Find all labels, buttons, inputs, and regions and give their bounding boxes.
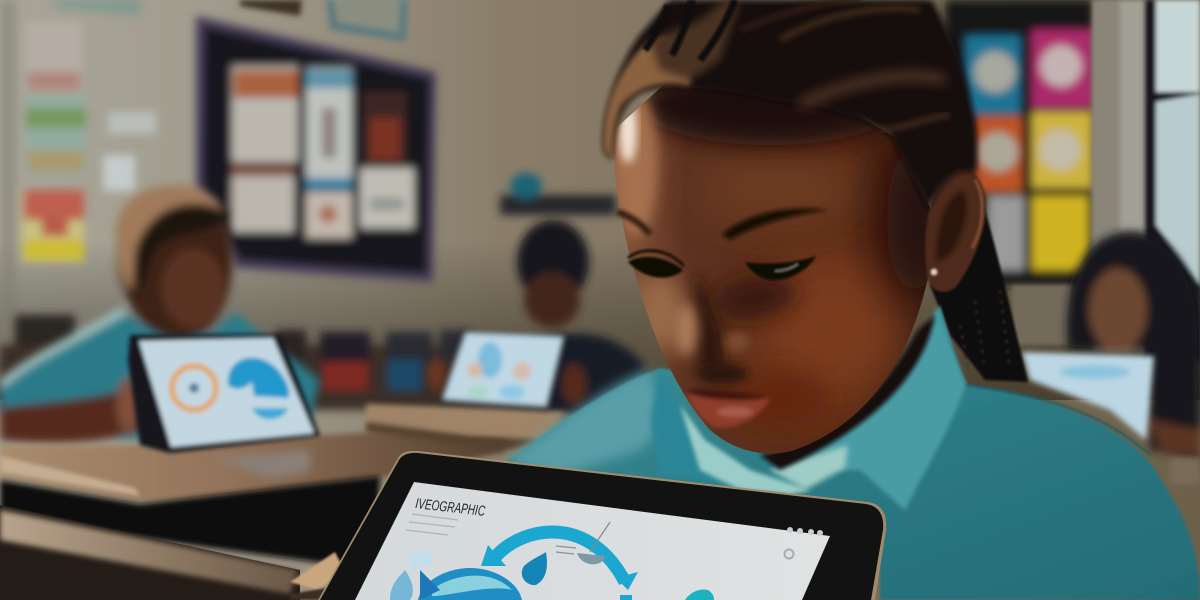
- right wall and window: [1012, 0, 1200, 360]
- under nose shadow: [696, 364, 748, 384]
- settings icon: [784, 550, 794, 558]
- blue arc: [252, 408, 288, 419]
- teal blob: [685, 589, 714, 600]
- top wall frames: [240, 0, 408, 42]
- right eyebrow: [722, 208, 828, 240]
- globe graphic: [418, 568, 522, 600]
- back shelf: [500, 173, 616, 215]
- wall posters on the left: [0, 0, 156, 360]
- student shirt: [0, 312, 320, 440]
- shirt collar right: [770, 306, 966, 510]
- blue cycle arrow: [481, 532, 638, 590]
- earring: [931, 269, 937, 275]
- low cabinets: [0, 315, 600, 410]
- tablet right: [1022, 352, 1154, 440]
- girl ear: [925, 168, 986, 292]
- upper forehead shading: [640, 85, 886, 160]
- desk left: [0, 404, 1200, 570]
- foreground desk: [0, 505, 345, 600]
- girl back braids: [930, 200, 1028, 382]
- forehead highlight: [619, 97, 637, 163]
- right bulletin board with coloured cards: [945, 0, 1093, 285]
- girl shirt: [400, 305, 1200, 600]
- under desk shadow: [0, 476, 380, 570]
- tablet screen: [355, 482, 830, 600]
- tablet small text lines: [406, 514, 458, 535]
- drop and splash: [390, 550, 433, 600]
- mid forehead glow: [700, 160, 860, 220]
- tablet left screen: [139, 338, 314, 447]
- collar lit edge: [770, 445, 848, 490]
- lips: [686, 389, 770, 428]
- hair rows: [645, 0, 735, 60]
- tablet rear: [440, 330, 566, 410]
- forehead lit side: [614, 93, 658, 237]
- right student: [1067, 232, 1200, 460]
- orange ring chart: [172, 366, 216, 410]
- rear student: [426, 220, 660, 420]
- bulletin board: [196, 16, 436, 282]
- nose tip: [725, 332, 749, 352]
- girl hair: [603, 0, 977, 210]
- bright desk edge: [0, 456, 140, 496]
- camera dots: [787, 527, 823, 536]
- water drop icon: [522, 552, 547, 585]
- face shading layers: [614, 65, 943, 430]
- foreground tablet: [318, 451, 886, 600]
- tablet left: [128, 334, 320, 453]
- left student: [0, 185, 320, 443]
- girl neck shadow: [760, 315, 935, 470]
- left cheek light: [634, 272, 686, 352]
- right temple shadow: [887, 140, 943, 300]
- tablet title: IVEOGRAPHIC: [415, 496, 486, 520]
- right eye: [745, 256, 816, 280]
- shirt left highlight: [505, 370, 670, 475]
- tablet body: [318, 451, 886, 600]
- student head: [116, 185, 232, 340]
- small arrow piece: [620, 595, 632, 600]
- left eye: [628, 251, 684, 278]
- nose highlight: [675, 304, 697, 356]
- hair frizz highlight: [603, 38, 690, 160]
- left eyebrow: [617, 212, 650, 234]
- tablet reflection on desk: [215, 450, 310, 478]
- under eye shadow: [710, 271, 800, 325]
- girl face: [614, 65, 943, 454]
- face warm cheek: [755, 255, 905, 405]
- blue cloud shape: [228, 358, 289, 398]
- shirt collar left: [680, 405, 810, 495]
- small label lines: [556, 546, 576, 554]
- flask bowl icon: [577, 522, 610, 564]
- student arm: [0, 385, 145, 443]
- nose side shadow: [695, 270, 724, 374]
